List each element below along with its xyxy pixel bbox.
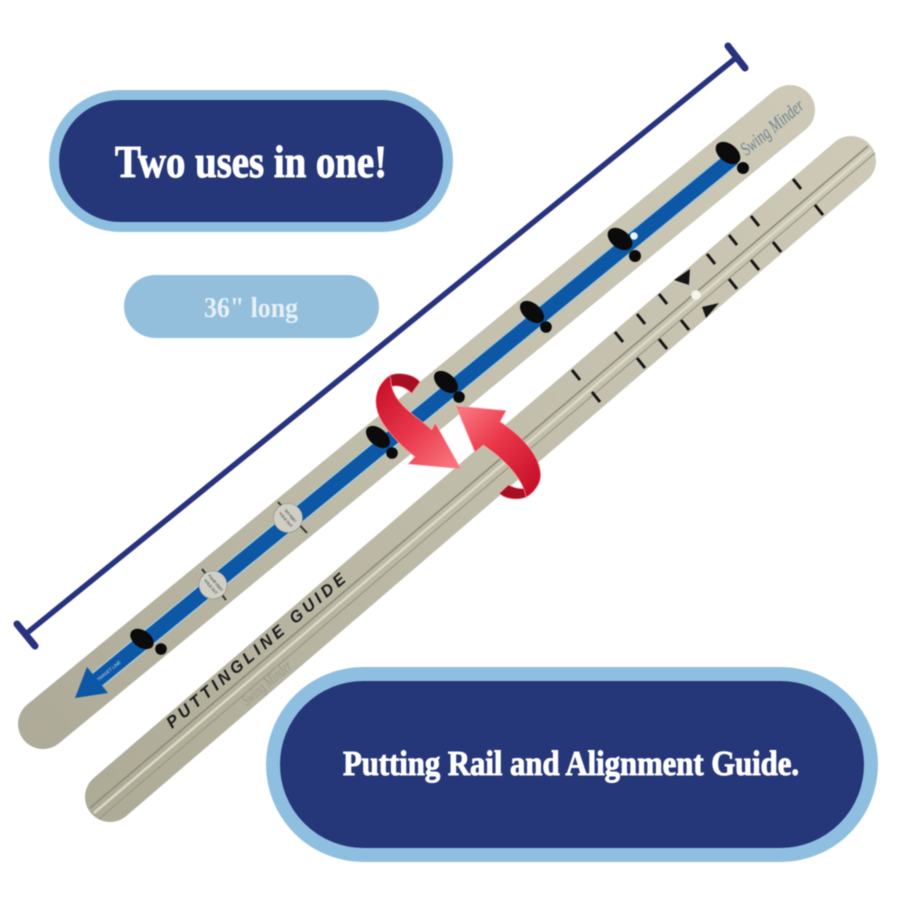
tick marks xyxy=(572,179,823,402)
centre grooves xyxy=(90,146,875,819)
label: 36 long: 36" long xyxy=(204,293,298,324)
heading: two uses in one: Two uses in one! xyxy=(115,137,387,187)
blue stripe xyxy=(97,158,733,680)
left arrow xyxy=(376,374,461,469)
rail: alignment guide xyxy=(90,146,875,819)
marker circle lower xyxy=(199,569,227,600)
title: puttingline guide: PUTTINGLINE GUIDE xyxy=(163,570,350,732)
length measure line: 36 inches xyxy=(17,46,745,646)
icon: red flip arrows xyxy=(376,374,541,499)
marker circle lower: HOLE OUT xyxy=(203,579,219,596)
pill: two uses in one xyxy=(54,95,448,227)
footprints xyxy=(126,137,749,655)
brand: Swing Minder faint: Swing Minder xyxy=(239,657,296,709)
arrow head xyxy=(75,667,108,698)
right arrow xyxy=(456,406,541,499)
brand: Swing Minder: Swing Minder xyxy=(737,95,809,160)
marker circle upper: SIX FEET xyxy=(284,509,297,524)
marker circle upper: HOLE OUT xyxy=(278,512,294,529)
rail hole xyxy=(630,232,638,240)
pill: 36 inches long xyxy=(124,275,379,338)
label: target line: TARGET LINE xyxy=(96,660,122,682)
guide hole xyxy=(691,290,701,300)
marker circle upper xyxy=(274,502,307,533)
marker circle lower: FOUR FEET xyxy=(207,574,224,593)
alignment triangles xyxy=(674,269,719,318)
rail: putting rail with blue stripe xyxy=(43,95,809,724)
heading: putting rail and alignment guide: Putting Rail and Alignment Guide. xyxy=(343,744,799,783)
pill: product name xyxy=(273,674,871,855)
